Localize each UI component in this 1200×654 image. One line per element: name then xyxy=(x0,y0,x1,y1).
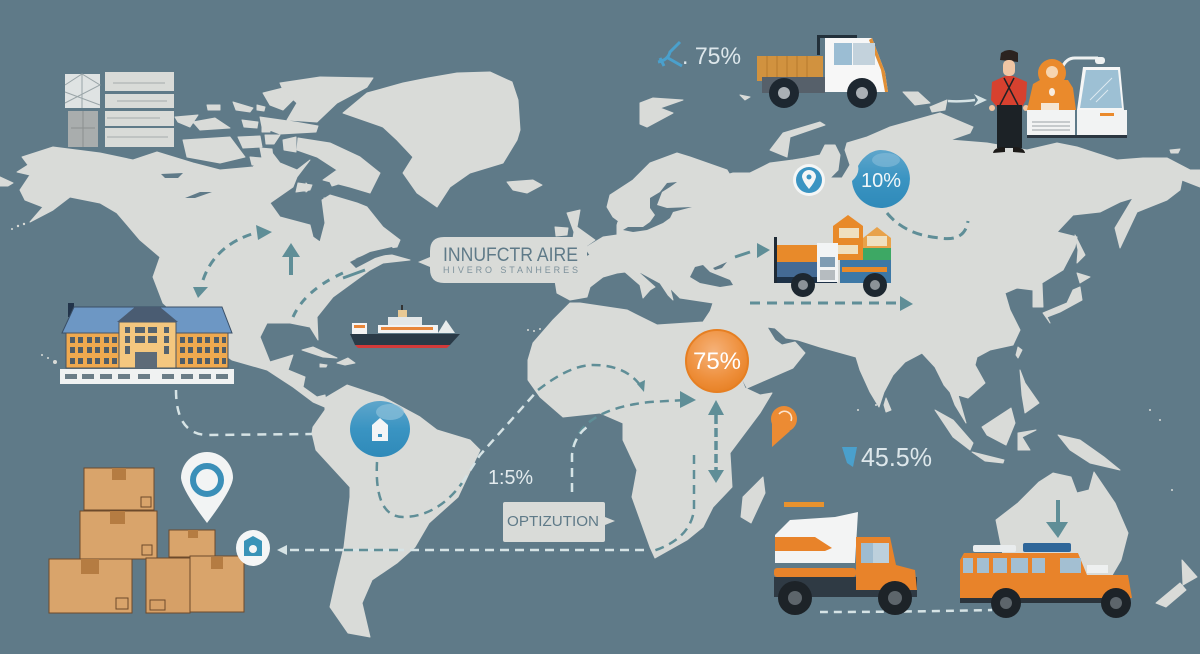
icon: gray box xyxy=(68,111,98,147)
dashed route: east coast xyxy=(293,273,343,317)
icon: cruise ship xyxy=(350,305,460,348)
dashed route: Siberia xyxy=(887,213,968,239)
Eurasia xyxy=(552,113,1200,423)
stat: blue 10 percent xyxy=(852,150,910,208)
callout: innufctr aire: INNUFCTR AIRE xyxy=(443,245,578,266)
icon: dump truck xyxy=(757,35,888,108)
stat: top 75 percent xyxy=(658,42,741,70)
Africa xyxy=(528,303,772,558)
dashed route: Atlantic horizontal xyxy=(277,545,650,555)
icon: open box xyxy=(65,74,100,108)
United Kingdom and Ireland xyxy=(555,210,595,247)
double arrow Africa xyxy=(708,400,724,483)
icon: cargo truck with houses xyxy=(774,215,891,297)
icon: white location pin xyxy=(181,452,233,523)
stat: orange 75 percent xyxy=(686,330,748,392)
stat: top 75 percent: . 75% xyxy=(682,43,741,70)
stat: orange 75 percent: 75% xyxy=(693,348,741,375)
text rows xyxy=(105,72,174,147)
dashed route: Africa right xyxy=(650,455,694,552)
callout: optimization: OPTIZUTION xyxy=(507,513,599,530)
New Zealand xyxy=(1156,560,1197,607)
arrow Australia xyxy=(1046,500,1068,538)
up arrow xyxy=(282,243,300,275)
icon: orange machine and bus xyxy=(1027,57,1127,138)
islands and dotted archipelagos xyxy=(11,223,1173,491)
callout: innufctr aire xyxy=(418,237,587,283)
Siberian tip xyxy=(0,177,13,186)
callout: innufctr aire: HIVERO STANHERES xyxy=(443,265,578,275)
icon: location badge xyxy=(793,164,825,196)
stat: 45.5 percent: 45.5% xyxy=(861,442,932,472)
North America xyxy=(17,147,410,408)
Sri Lanka xyxy=(884,398,891,412)
icon: orange bus xyxy=(960,543,1132,618)
icon: camera badge xyxy=(236,530,270,566)
Caribbean islands xyxy=(302,347,355,367)
Japan and Sakhalin xyxy=(1043,235,1090,323)
dashed arrow central Asia xyxy=(750,296,913,311)
Arctic islands xyxy=(175,77,380,203)
Iceland xyxy=(507,180,542,193)
icon: blue house badge xyxy=(350,401,410,457)
Greenland xyxy=(343,72,520,207)
dashed route: Africa lower xyxy=(572,391,696,492)
great lakes strip xyxy=(343,270,365,278)
Madagascar xyxy=(741,477,765,523)
arrow to courier xyxy=(948,94,987,106)
Southeast Asian islands xyxy=(935,347,1120,470)
arrow to truck xyxy=(735,243,770,258)
dashes between trucks xyxy=(820,610,992,612)
icon: orange truck with load xyxy=(774,502,917,615)
dashed route: North America curve xyxy=(193,225,272,298)
South America xyxy=(312,385,480,637)
callout: optimization xyxy=(503,502,615,542)
stat: blue 10 percent: 10% xyxy=(861,170,901,192)
figure: courier xyxy=(989,50,1029,153)
Svalbard and Arctic Russian islands xyxy=(640,92,1180,157)
icon: orange pin xyxy=(771,406,797,447)
icon: cardboard boxes xyxy=(49,468,244,613)
Australia xyxy=(996,472,1128,590)
panel: document stack xyxy=(65,72,174,147)
dashed route: Africa upper xyxy=(538,365,645,392)
dashed route: Pacific xyxy=(176,390,312,435)
inland seas and lakes xyxy=(161,173,733,287)
dashed route: South America xyxy=(377,390,538,517)
icon: building xyxy=(60,303,234,384)
stat: 1.5 percent: 1:5% xyxy=(488,467,533,489)
